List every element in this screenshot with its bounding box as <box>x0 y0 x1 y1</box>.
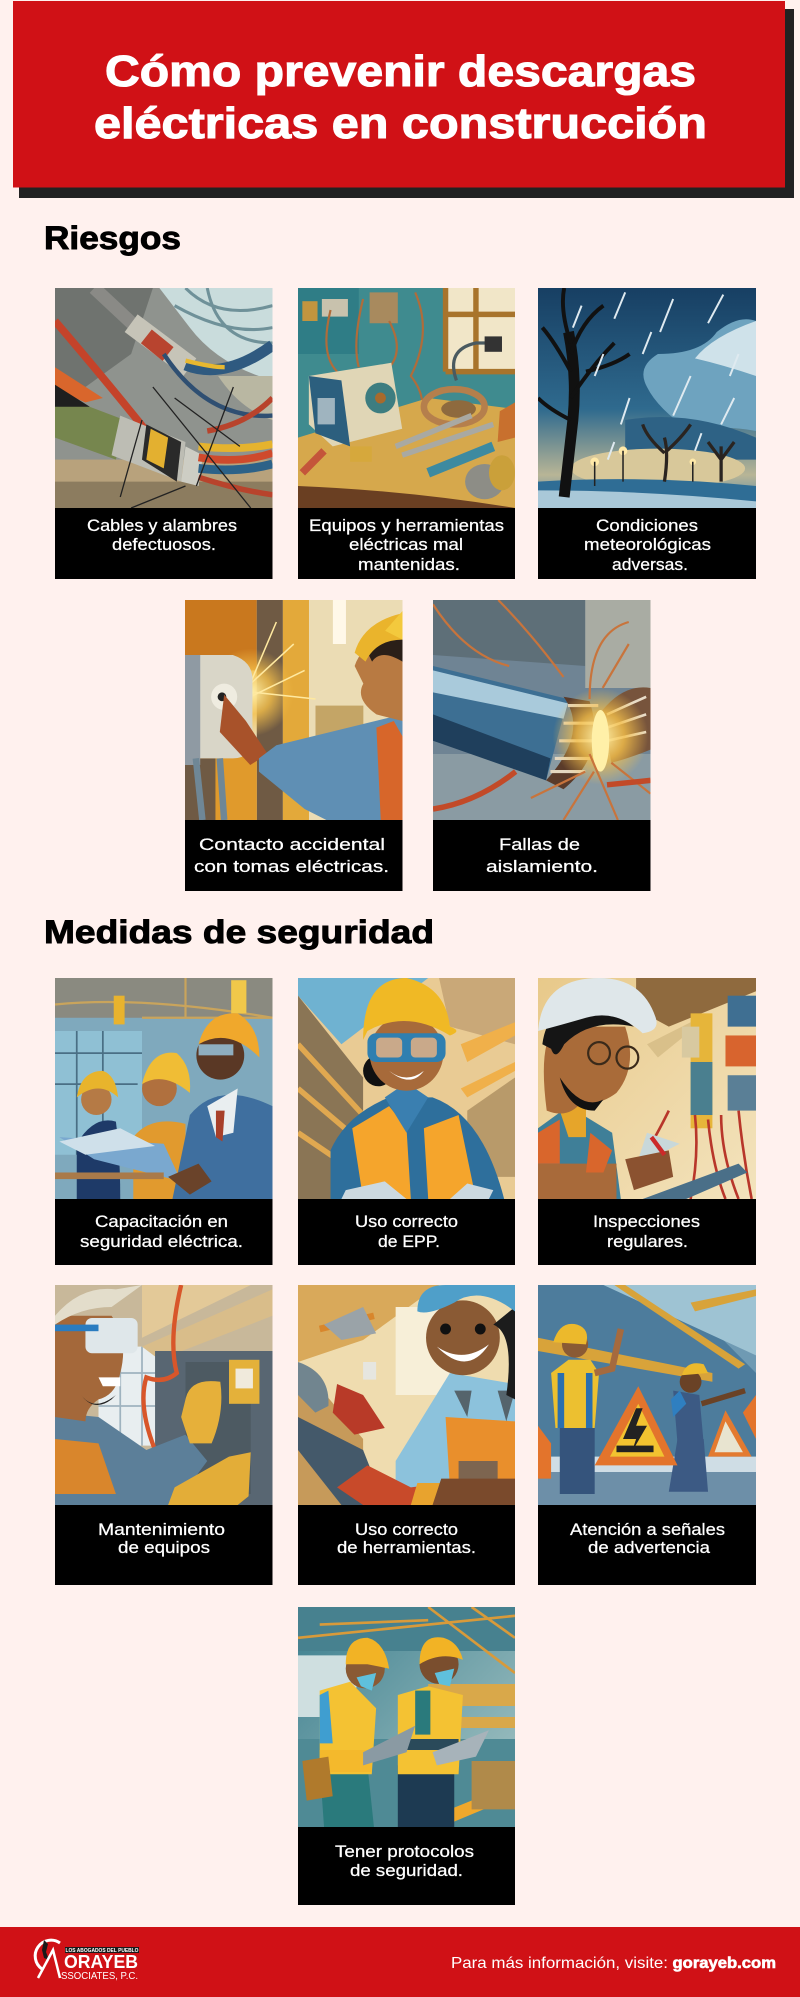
caption: condiciones: adversas. <box>612 556 688 574</box>
caption: señales: de advertencia <box>588 1539 711 1557</box>
caption: mantenimiento: Mantenimiento <box>98 1521 225 1539</box>
caption: herramientas: de herramientas. <box>337 1539 476 1557</box>
caption: EPP: Uso correcto <box>355 1213 458 1231</box>
panel: uso de EPP <box>298 978 515 1265</box>
panel: inspecciones regulares <box>538 978 756 1265</box>
caption: equipos <box>298 508 515 579</box>
illustration: two workers with tablets <box>298 1607 515 1827</box>
illustration: workers near warning signs <box>538 1285 756 1505</box>
illustration: woman holding tools <box>298 1285 515 1505</box>
panel: fallas de aislamiento <box>433 600 650 891</box>
logo: Gorayeb & Associates: ORAYEB <box>64 1952 138 1972</box>
panel: condiciones meteorologicas <box>538 288 756 579</box>
panel: capacitacion <box>55 978 272 1265</box>
panel: contacto accidental <box>185 600 402 891</box>
panel: uso de herramientas <box>298 1285 515 1585</box>
caption: equipos: mantenidas. <box>358 556 460 574</box>
caption: cables: Cables y alambres <box>87 517 237 535</box>
logo: Gorayeb & Associates: LOS ABOGADOS DEL PUEBLO <box>66 1948 139 1954</box>
footer call to action: gorayeb.com <box>672 1955 776 1972</box>
caption: condiciones: meteorológicas <box>584 536 711 554</box>
caption: capacitacion: seguridad eléctrica. <box>80 1233 243 1251</box>
caption: mantenimiento: de equipos <box>118 1539 210 1557</box>
illustration: frayed cables <box>55 288 272 508</box>
panel: cables defectuosos <box>55 288 272 579</box>
caption: protocolos: Tener protocolos <box>335 1843 474 1861</box>
panel: señales de advertencia <box>538 1285 756 1585</box>
title banner <box>13 1 794 198</box>
title text: eléctricas en construcción <box>94 99 707 148</box>
panel: mantenimiento <box>55 1285 272 1585</box>
caption: capacitacion: Capacitación en <box>95 1213 228 1231</box>
caption: cables: defectuosos. <box>112 536 216 554</box>
footer <box>0 1927 800 1997</box>
caption: cables <box>55 508 272 579</box>
illustration: woman with helmet and goggles <box>298 978 515 1199</box>
illustration: inspector with clipboard at panel <box>538 978 756 1199</box>
caption: protocolos: de seguridad. <box>350 1862 463 1880</box>
illustration: worker touching sparking outlet <box>185 600 402 820</box>
footer call to action: Para más información, visite: <box>451 1955 668 1972</box>
caption: EPP <box>298 1199 515 1265</box>
caption: fallas <box>433 820 650 891</box>
footer call to action <box>451 1955 776 1972</box>
heading: Riesgos: Riesgos <box>44 220 181 256</box>
caption: señales <box>538 1505 756 1585</box>
caption: contacto <box>185 820 402 891</box>
illustration: damaged cable insulation <box>433 600 650 820</box>
caption: contacto: con tomas eléctricas. <box>194 858 389 876</box>
heading: Medidas de seguridad: Medidas de seguridad <box>44 914 434 950</box>
panel: equipos mal mantenidos <box>298 288 515 579</box>
illustration: worn electrical equipment on workbench <box>298 288 515 508</box>
logo: Gorayeb & Associates: SSOCIATES, P.C. <box>61 1971 138 1982</box>
caption: condiciones <box>538 508 756 579</box>
caption: capacitacion <box>55 1199 272 1265</box>
caption: inspecciones <box>538 1199 756 1265</box>
illustration: three workers with blueprints <box>55 978 272 1199</box>
caption: contacto: Contacto accidental <box>199 836 385 854</box>
title text: Cómo prevenir descargas <box>105 47 696 96</box>
caption: señales: Atención a señales <box>570 1521 725 1539</box>
caption: fallas: aislamiento. <box>486 858 598 876</box>
panel: protocolos de seguridad <box>298 1607 515 1905</box>
caption: herramientas <box>298 1505 515 1585</box>
caption: condiciones: Condiciones <box>596 517 698 535</box>
illustration: electrician servicing fuse box <box>55 1285 272 1505</box>
logo: Gorayeb & Associates <box>35 1940 139 1982</box>
caption: inspecciones: Inspecciones <box>593 1213 700 1231</box>
caption: equipos: eléctricas mal <box>349 536 463 554</box>
title text <box>94 47 707 148</box>
caption: EPP: de EPP. <box>378 1233 440 1251</box>
caption: herramientas: Uso correcto <box>355 1521 458 1539</box>
caption: protocolos <box>298 1827 515 1905</box>
caption: mantenimiento <box>55 1505 272 1585</box>
illustration: storm with bare tree <box>538 288 756 508</box>
caption: fallas: Fallas de <box>499 836 580 854</box>
caption: inspecciones: regulares. <box>607 1233 688 1251</box>
caption: equipos: Equipos y herramientas <box>309 517 504 535</box>
